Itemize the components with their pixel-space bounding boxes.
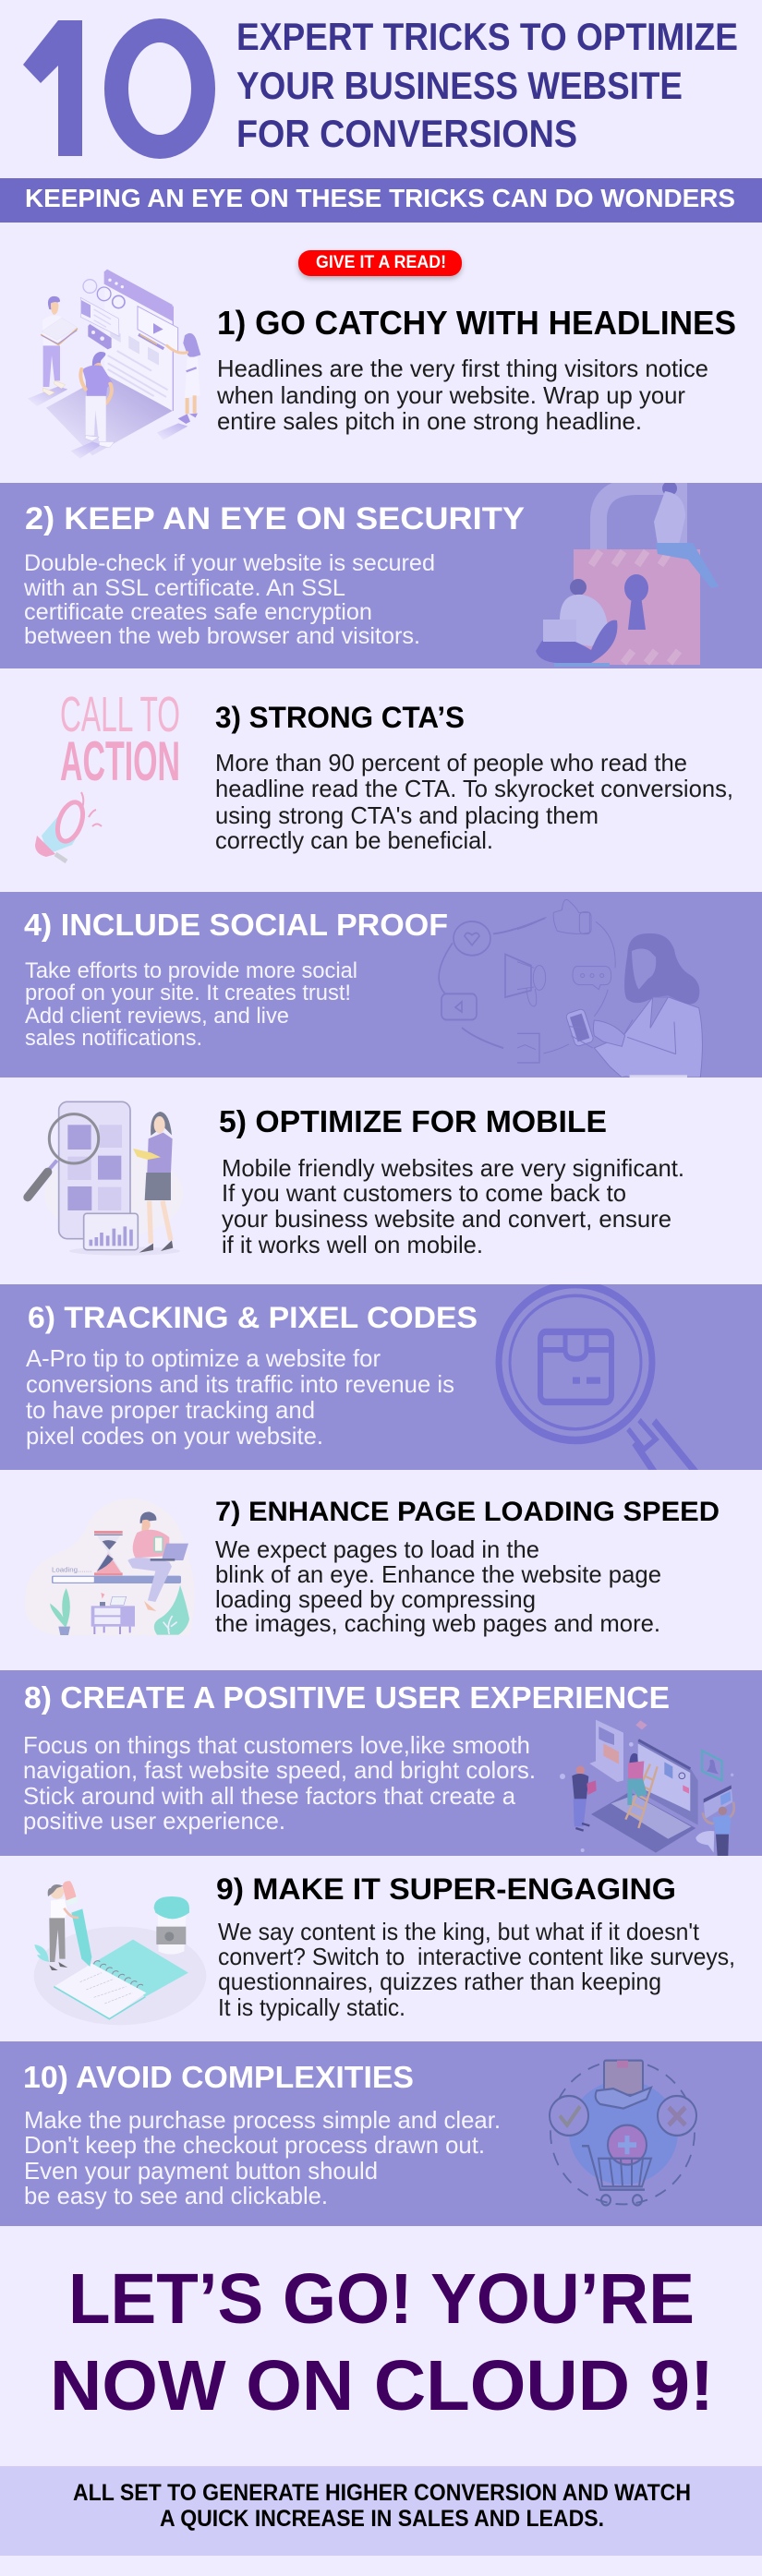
- heading: 8) CREATE A POSITIVE USER EXPERIENCE: [24, 1680, 670, 1715]
- text block: Even your payment button should: [24, 2157, 378, 2185]
- text block: It is typically static.: [218, 1993, 405, 2021]
- text block: using strong CTA's and placing them: [215, 801, 599, 829]
- text block: [25, 958, 357, 1051]
- footer band: A QUICK INCREASE IN SALES AND LEADS.: [160, 2506, 604, 2532]
- text block: Stick around with all these factors that create a: [23, 1782, 516, 1810]
- text block: Don't keep the checkout process drawn out.: [24, 2131, 485, 2159]
- text block: entire sales pitch in one strong headline.: [217, 407, 642, 435]
- text block: A-Pro tip to optimize a website for: [26, 1344, 381, 1372]
- text block: Double-check if your website is secured: [24, 550, 435, 576]
- text block: [215, 749, 733, 854]
- text block: positive user experience.: [23, 1807, 285, 1835]
- text block: sales notifications.: [25, 1026, 202, 1051]
- panel: 6 tracking: [0, 1284, 762, 1470]
- closing headline: [50, 2259, 714, 2426]
- text block: [216, 355, 708, 435]
- text block: the images, caching web pages and more.: [215, 1609, 660, 1637]
- subtitle band: [0, 178, 762, 223]
- illustration: call to action: ACTION: [60, 730, 180, 792]
- illustration: call to action: [35, 687, 180, 861]
- badge: give it a read: GIVE IT A READ!: [316, 253, 446, 272]
- illustration: team on laptop: [560, 1720, 734, 1856]
- heading: 9) MAKE IT SUPER-ENGAGING: [216, 1872, 676, 1906]
- panel: 9 engaging: [34, 1872, 735, 2025]
- illustration: call to action: CALL TO: [60, 687, 180, 742]
- illustration: phone, magnifier and woman: [28, 1101, 183, 1256]
- title: YOUR BUSINESS WEBSITE: [236, 64, 683, 107]
- text block: [23, 1731, 536, 1835]
- closing headline: NOW ON CLOUD 9!: [50, 2346, 714, 2426]
- heading: 1) GO CATCHY WITH HEADLINES: [217, 304, 736, 342]
- footer band: [0, 2466, 762, 2556]
- text block: if it works well on mobile.: [222, 1231, 483, 1258]
- illustration: woman with social icons: [439, 899, 702, 1079]
- text block: We expect pages to load in the: [215, 1535, 539, 1563]
- text block: Focus on things that customers love,like smooth: [23, 1731, 530, 1759]
- panel: 4 social proof: [0, 892, 762, 1079]
- text block: between the web browser and visitors.: [24, 623, 420, 649]
- text block: Make the purchase process simple and clear.: [24, 2106, 501, 2134]
- header: [23, 15, 738, 156]
- icon: magnifier with package: [495, 1284, 698, 1470]
- footer band: ALL SET TO GENERATE HIGHER CONVERSION AND WATCH: [73, 2480, 691, 2506]
- heading: 7) ENHANCE PAGE LOADING SPEED: [215, 1497, 720, 1527]
- illustration: notebook and pencil: [34, 1881, 206, 2025]
- illustration: padlock with people: [536, 481, 719, 665]
- illustration: loading man and hourglass: [25, 1499, 195, 1636]
- text block: with an SSL certificate. An SSL: [23, 575, 345, 601]
- text block: questionnaires, quizzes rather than keeping: [218, 1968, 661, 1995]
- text block: when landing on your website. Wrap up your: [216, 381, 685, 409]
- heading: 5) OPTIMIZE FOR MOBILE: [219, 1104, 607, 1138]
- panel: 8 user experience: [0, 1670, 762, 1856]
- text block: [23, 550, 435, 649]
- text block: [215, 1535, 661, 1637]
- text block: certificate creates safe encryption: [24, 599, 372, 625]
- text block: correctly can be beneficial.: [215, 826, 493, 854]
- text block: Take efforts to provide more social: [25, 958, 357, 983]
- big number 10: [23, 20, 203, 156]
- panel: 3 CTA: [35, 687, 733, 861]
- text block: loading speed by compressing: [215, 1585, 536, 1613]
- text block: to have proper tracking and: [26, 1396, 315, 1424]
- text block: [24, 2106, 501, 2209]
- illustration: loading man and hourglass: Loading.......: [52, 1565, 91, 1573]
- title: FOR CONVERSIONS: [236, 112, 577, 155]
- text block: Headlines are the very first thing visitors notice: [217, 355, 708, 382]
- text block: headline read the CTA. To skyrocket conversions,: [215, 775, 733, 802]
- text block: [26, 1344, 454, 1450]
- text block: We say content is the king, but what if it doesn't: [218, 1918, 700, 1945]
- text block: More than 90 percent of people who read the: [215, 749, 687, 776]
- text block: Add client reviews, and live: [25, 1004, 289, 1029]
- heading: 4) INCLUDE SOCIAL PROOF: [24, 908, 448, 942]
- text block: If you want customers to come back to: [222, 1179, 626, 1207]
- heading: 2) KEEP AN EYE ON SECURITY: [25, 501, 525, 536]
- badge: give it a read: [298, 250, 462, 276]
- illustration: website team: [28, 270, 200, 459]
- text block: Mobile friendly websites are very significant.: [222, 1154, 684, 1182]
- text block: your business website and convert, ensure: [222, 1205, 671, 1233]
- heading: 6) TRACKING & PIXEL CODES: [28, 1301, 478, 1334]
- closing headline: LET’S GO! YOU’RE: [68, 2259, 695, 2339]
- text block: conversions and its traffic into revenue is: [26, 1370, 454, 1398]
- text block: pixel codes on your website.: [26, 1422, 323, 1450]
- panel: 1 headlines: [28, 270, 736, 459]
- panel: 2 security: [0, 481, 762, 668]
- text block: navigation, fast website speed, and bright colors.: [23, 1756, 536, 1784]
- text block: [218, 1918, 735, 2021]
- text block: blink of an eye. Enhance the website page: [215, 1560, 661, 1588]
- heading: 10) AVOID COMPLEXITIES: [23, 2060, 414, 2094]
- heading: 3) STRONG CTA’S: [215, 701, 465, 734]
- panel: 5 mobile: [28, 1101, 684, 1258]
- text block: proof on your site. It creates trust!: [25, 981, 351, 1005]
- panel: 10 complexities: [0, 2041, 762, 2226]
- text block: convert? Switch to interactive content like surveys,: [218, 1943, 735, 1970]
- title: [236, 15, 738, 155]
- icon: cart and checkout: [550, 2061, 696, 2206]
- panel: 7 loading speed: [25, 1497, 720, 1637]
- subtitle band: KEEPING AN EYE ON THESE TRICKS CAN DO WONDERS: [25, 184, 735, 212]
- text block: [222, 1154, 684, 1258]
- text block: be easy to see and clickable.: [24, 2182, 328, 2209]
